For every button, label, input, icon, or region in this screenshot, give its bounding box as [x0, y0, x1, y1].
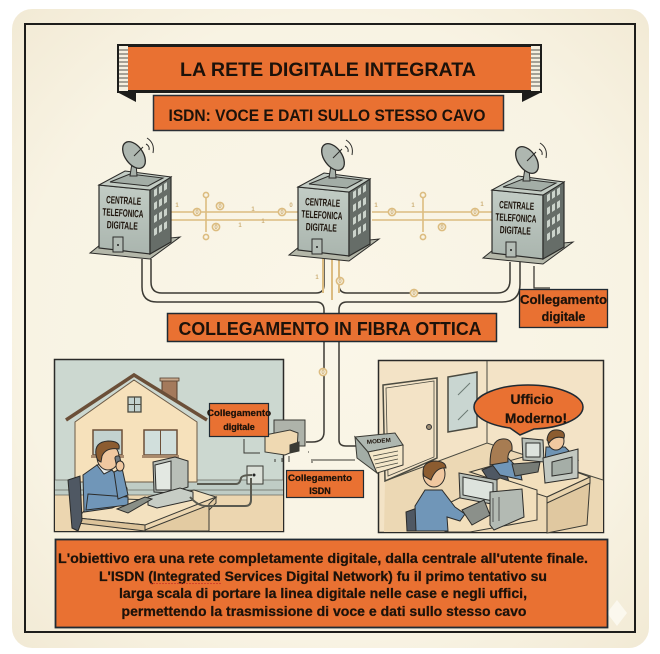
building: centrale 1: [90, 138, 180, 259]
icon: modem: [355, 433, 403, 473]
building label: TELEFONICA: [495, 211, 537, 226]
text block: summary: L'obiettivo era una rete completamente digitale, dalla centrale all'utente finale.: [58, 551, 588, 566]
binary digits: 0: [195, 210, 199, 216]
binary digits: 0: [289, 203, 293, 209]
arrow: digital link pointer: [534, 266, 550, 288]
callout: ufficio moderno: Ufficio: [510, 391, 554, 407]
window: [448, 372, 477, 432]
label: collegamento isdn: [286, 470, 364, 498]
binary digits: 0: [440, 225, 444, 231]
person on phone: [83, 441, 128, 512]
wall socket and cable: [190, 466, 263, 506]
building label: TELEFONICA: [102, 206, 144, 221]
heading: collegamento in fibra ottica: COLLEGAMENTO IN FIBRA OTTICA: [178, 318, 482, 339]
panel: office scene: [378, 360, 604, 533]
title text: LA RETE DIGITALE INTEGRATA: [180, 59, 476, 81]
text block: summary: L'ISDN (Integrated Services Digital Network) fu il primo tentativo su: [99, 569, 547, 584]
binary digits: 1: [411, 203, 415, 209]
binary digits: 1: [175, 203, 179, 209]
house: [66, 375, 207, 482]
binary digits: 1: [251, 207, 255, 213]
binary digits: 0: [390, 210, 394, 216]
icon: splitter box: [244, 420, 355, 463]
building label: CENTRALE: [305, 196, 340, 210]
back worker: [522, 430, 578, 483]
binary digits: 1: [480, 202, 484, 208]
door: [383, 378, 437, 481]
front worker: [406, 461, 465, 531]
text block: summary: larga scala di portare la linea digitale nelle case e negli uffici,: [119, 586, 527, 601]
building label: CENTRALE: [106, 194, 141, 208]
building label: DIGITALE: [305, 221, 337, 235]
subtitle banner: [154, 96, 504, 130]
label: collegamento digitale top right: digitale: [542, 310, 585, 324]
decorative diamond: [607, 600, 627, 626]
digital signal lines: [162, 192, 492, 376]
label: collegamento digitale top right: [520, 290, 608, 328]
binary digits: 1: [374, 203, 378, 209]
building: centrale 3: [483, 143, 573, 264]
binary digits: [175, 202, 484, 376]
binary digits: 0: [473, 210, 477, 216]
binary digits: 1: [261, 219, 265, 225]
label: collegamento isdn: Collegamento: [288, 473, 353, 483]
binary digits: 0: [338, 279, 342, 285]
binary digits: 0: [214, 225, 218, 231]
building label: TELEFONICA: [301, 208, 343, 223]
building label: CENTRALE: [499, 199, 534, 213]
fibre cables: [142, 258, 520, 446]
label: collegamento digitale: digitale: [223, 422, 255, 432]
building: centrale 2: [289, 140, 379, 261]
building label: DIGITALE: [499, 224, 531, 238]
binary digits: 0: [280, 210, 284, 216]
front computer: [459, 473, 524, 530]
label: collegamento isdn: ISDN: [309, 486, 331, 496]
woman worker: [482, 439, 540, 490]
binary digits: 0: [321, 370, 325, 376]
front desk: [445, 478, 537, 532]
binary digits: 0: [218, 204, 222, 210]
callout: ufficio moderno: [474, 385, 583, 435]
binary digits: 1: [238, 223, 242, 229]
callout: ufficio moderno: Moderno!: [505, 410, 567, 426]
chair: [68, 476, 82, 531]
label: collegamento digitale: Collegamento: [207, 408, 272, 418]
text block: summary: permettendo la trasmissione di voce e dati sullo stesso cavo: [122, 604, 526, 619]
text block: summary: [56, 540, 608, 628]
desk: [78, 490, 216, 531]
back desk: [470, 455, 590, 533]
label: collegamento digitale: [207, 404, 272, 436]
label: collegamento digitale top right: Collegamento: [520, 293, 607, 307]
icon: modem: MODEM: [367, 438, 391, 446]
binary digits: 0: [412, 291, 416, 297]
title ribbon: [117, 44, 542, 102]
panel: home scene: [54, 360, 284, 532]
subtitle text: ISDN: VOCE E DATI SULLO STESSO CAVO: [168, 107, 486, 125]
binary digits: 1: [315, 275, 319, 281]
computer: [117, 457, 193, 513]
building label: DIGITALE: [106, 219, 138, 233]
